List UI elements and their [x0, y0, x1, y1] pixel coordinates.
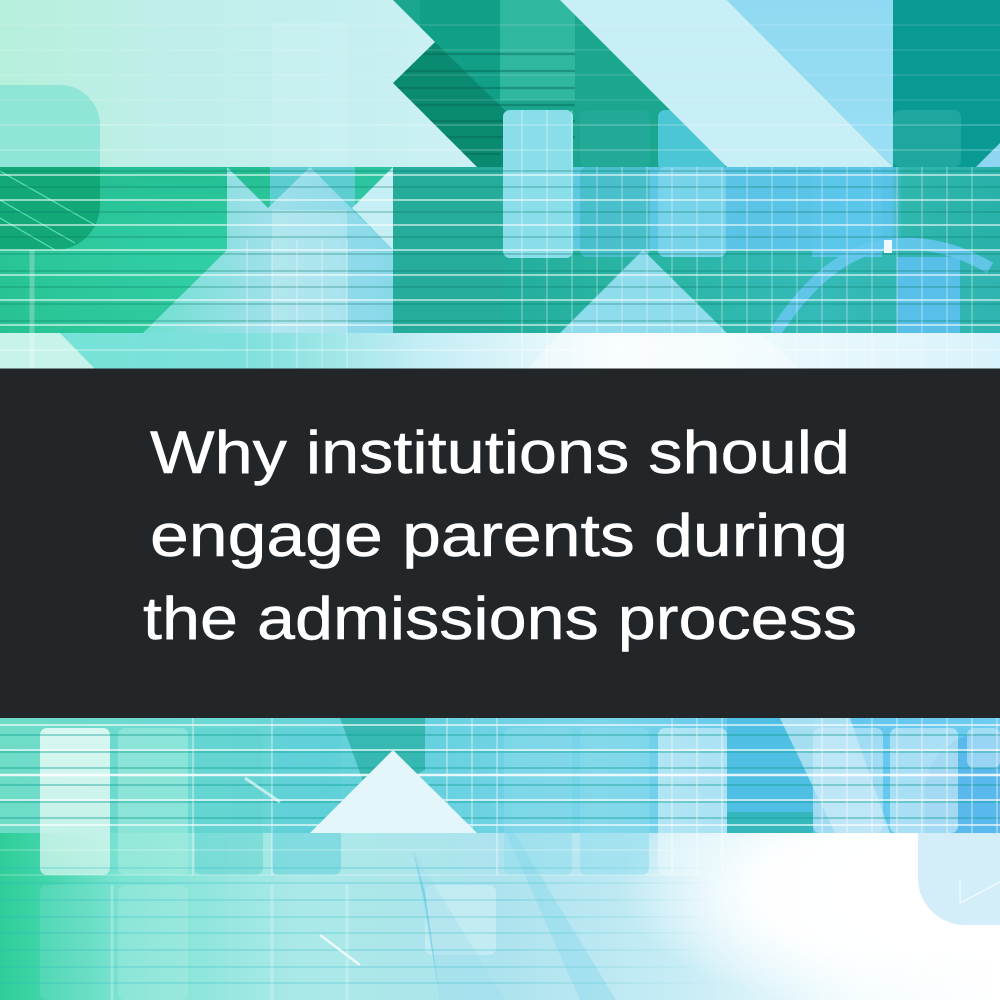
- pale highlight block: [272, 22, 347, 167]
- dark teal diamond: [393, 42, 520, 167]
- title text: [143, 419, 857, 652]
- middle right band: [393, 110, 1000, 333]
- top-left pale shape: [0, 0, 477, 167]
- title text: Why institutions should: [150, 419, 850, 486]
- sky blue triangle: [727, 0, 893, 167]
- lower rounded squares: [40, 728, 1000, 1000]
- lower teal wedge: [340, 718, 425, 800]
- lower right diagonal: [780, 718, 890, 833]
- title text: engage parents during: [150, 502, 848, 569]
- strip white wedge: [527, 333, 800, 369]
- crown small pale triangle: [352, 167, 393, 250]
- upper scan lines: [0, 25, 1000, 368]
- light streaks: [245, 778, 360, 965]
- lower right blue shape: [925, 733, 1000, 833]
- white glow bottom right: [620, 833, 1000, 1000]
- lower band background: [0, 718, 1000, 833]
- soft glow in crown: [272, 210, 347, 333]
- pale triangle in lower band: [310, 750, 477, 833]
- middle left green band: [0, 167, 400, 333]
- light diagonal band: [560, 0, 893, 167]
- lower scan lines: [0, 718, 1000, 1000]
- bottom right rounded panel: [918, 833, 1000, 925]
- teal stripes over dark area: [393, 54, 575, 154]
- top-left rounded square: [0, 85, 100, 250]
- bottom background: [0, 833, 1000, 1000]
- small triangle at right: [976, 143, 1000, 167]
- pale strip below grid: [0, 333, 1000, 369]
- second blue diagonal: [485, 785, 616, 1000]
- pale lower triangle in right band: [560, 250, 727, 333]
- lower blue column: [727, 718, 813, 833]
- thin blue sliver: [413, 850, 440, 1000]
- title band: [0, 368, 1000, 718]
- upper background: teal field behind shapes: [0, 0, 1000, 167]
- title text: the admissions process: [143, 585, 857, 652]
- pale blue crown shape: [143, 167, 393, 333]
- tinted squares over teal: [503, 110, 961, 260]
- strip corner triangle: [0, 333, 95, 369]
- long pale blue diagonal: [413, 850, 505, 1000]
